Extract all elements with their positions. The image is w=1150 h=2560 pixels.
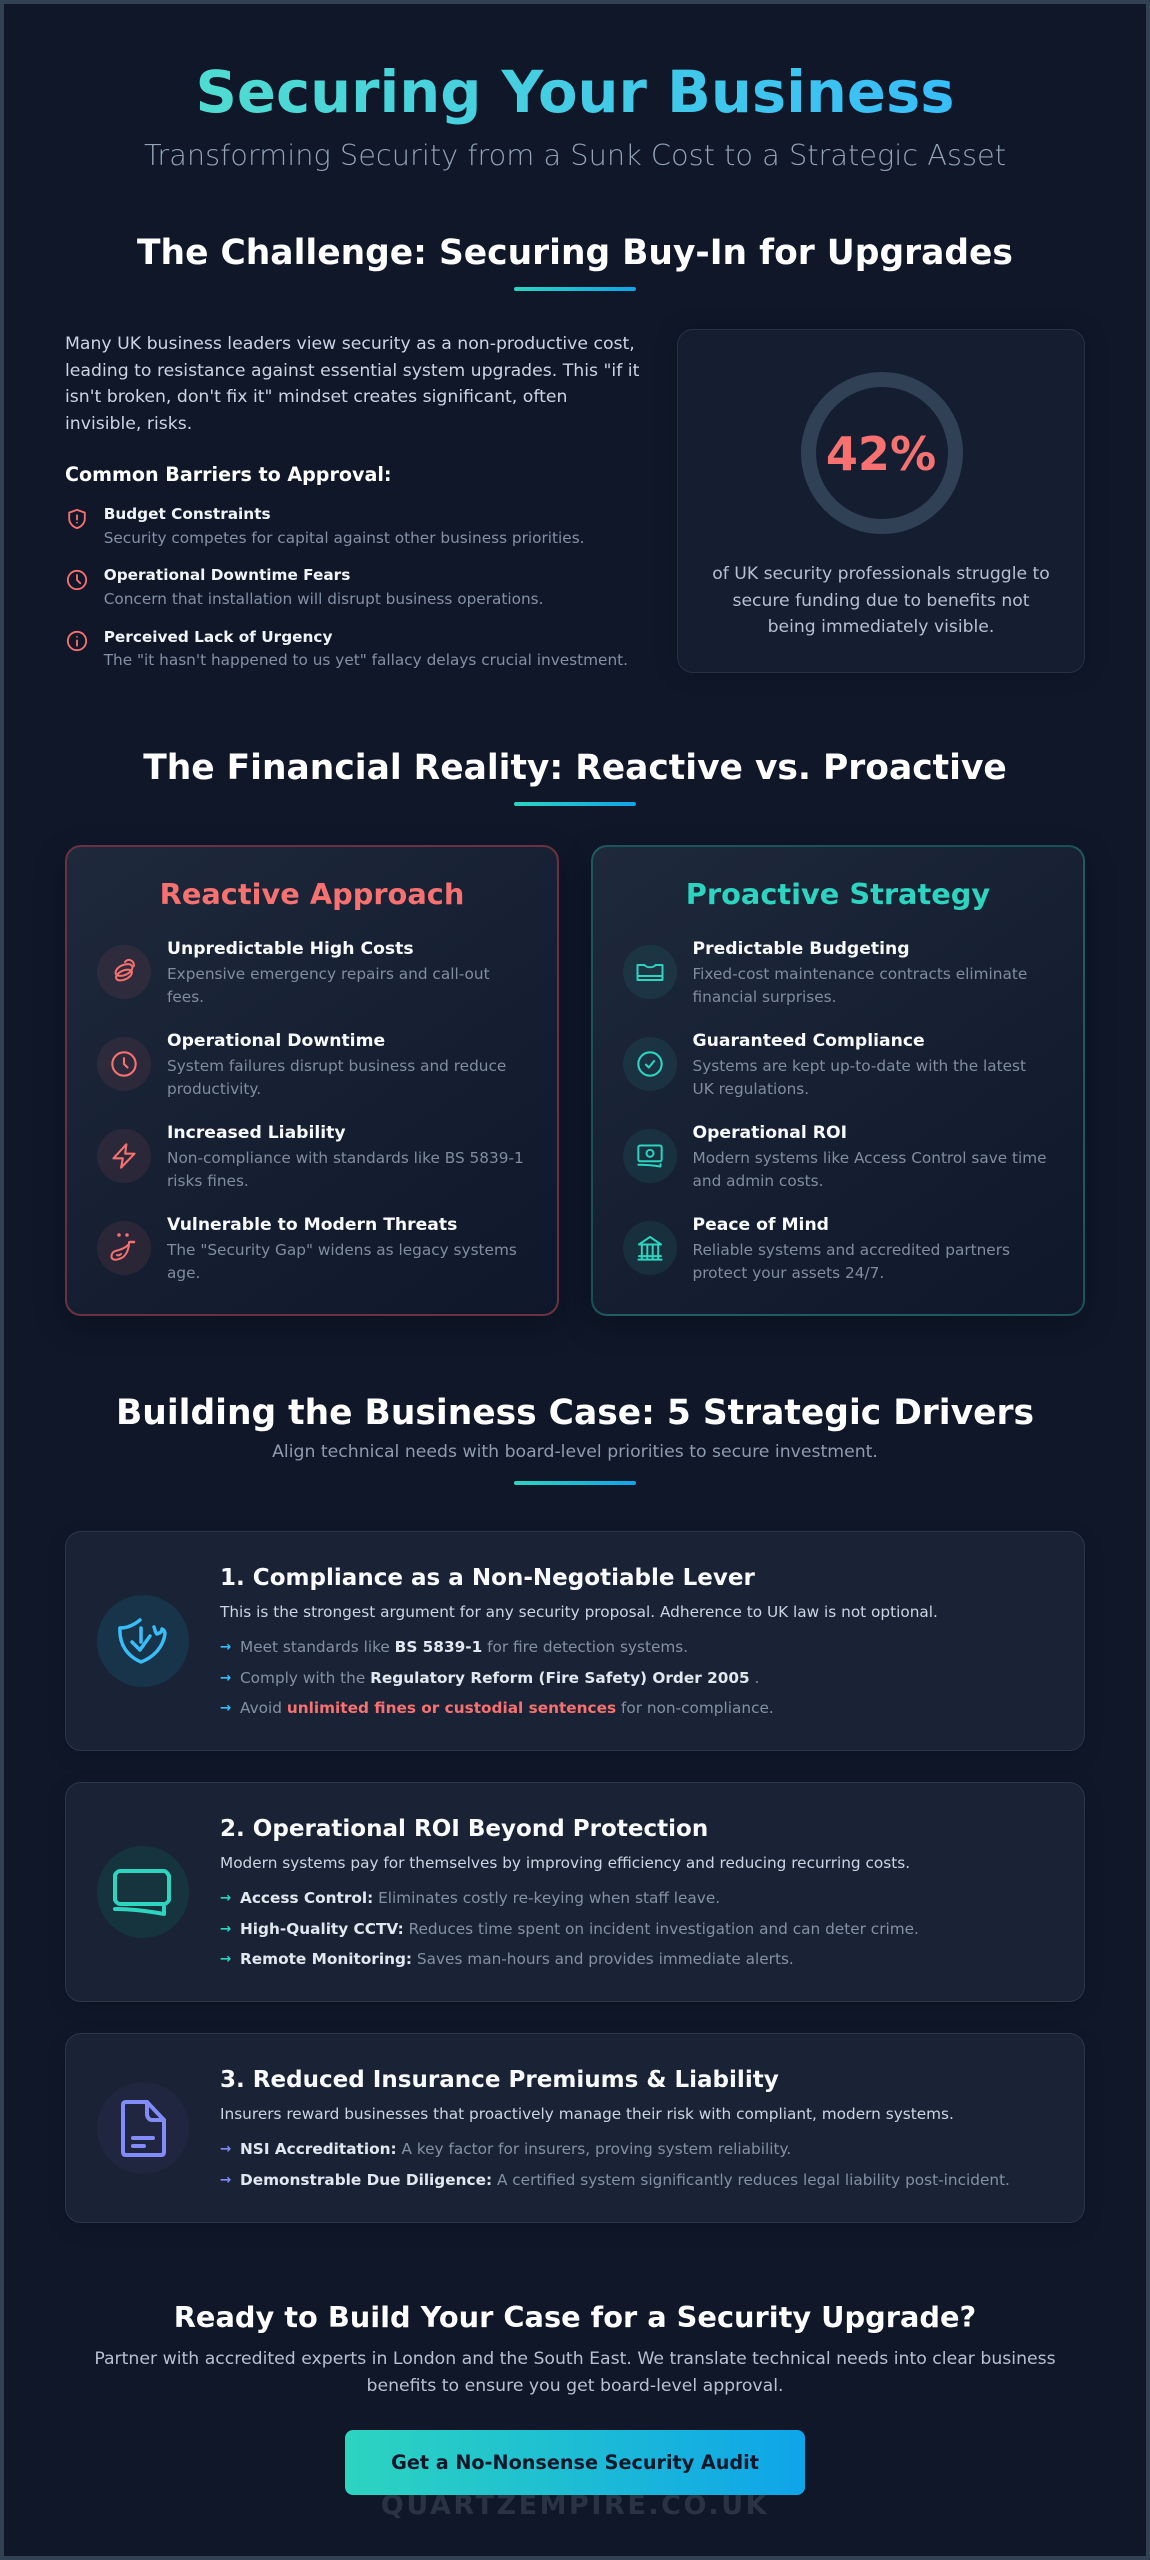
icon: operational device	[97, 1846, 189, 1938]
icon: banknote	[623, 1129, 677, 1183]
item: peace of mind: protect your assets 24/7.	[692, 1264, 884, 1282]
proactive heading: Proactive Strategy	[686, 876, 990, 910]
item: downtime	[97, 1031, 506, 1098]
item: threats: Vulnerable to Modern Threats	[167, 1215, 457, 1235]
heading: call to action: Ready to Build Your Case for a Security Upgrade?	[174, 2300, 976, 2334]
item: liability: Non-compliance with standards like BS 5839-1	[167, 1148, 524, 1166]
subtitle: Transforming Security from a Sunk Cost to a Strategic Asset	[144, 138, 1006, 172]
intro paragraph: isn't broken, don't fix it" mindset creates significant, often	[65, 387, 567, 407]
item: high costs	[97, 939, 490, 1006]
bullet list: →	[220, 1639, 231, 1655]
stat caption: secure funding due to benefits not	[732, 591, 1030, 611]
icon: clock	[66, 570, 88, 590]
barrier: urgency: The "it hasn't happened to us yet" fallacy delays crucial investment.	[104, 651, 628, 669]
bullet list: NSI Accreditation: A key factor for insurers, proving system reliability.	[240, 2140, 791, 2158]
item: downtime: Operational Downtime	[167, 1031, 385, 1051]
bullet list: →	[220, 1951, 231, 1967]
item: high costs: Expensive emergency repairs and call-out	[167, 964, 490, 982]
item: liability	[97, 1123, 524, 1190]
heading: the challenge: The Challenge: Securing Buy-In for Upgrades	[137, 233, 1013, 273]
item: liability: risks fines.	[167, 1172, 249, 1190]
stat caption	[712, 564, 1050, 637]
bullet list: Access Control: Eliminates costly re-keying when staff leave.	[240, 1889, 720, 1907]
item: liability: Increased Liability	[167, 1123, 346, 1143]
item: high costs: Unpredictable High Costs	[167, 939, 414, 959]
item: downtime: productivity.	[167, 1080, 261, 1098]
item: peace of mind	[623, 1215, 1010, 1282]
driver description: Insurers reward businesses that proactively manage their risk with compliant, modern systems.	[220, 2105, 954, 2123]
item: high costs: fees.	[167, 988, 204, 1006]
cta text: Partner with accredited experts in London and the South East. We translate technical needs into clear business	[94, 2349, 1056, 2369]
cta button	[345, 2430, 805, 2495]
intro paragraph: Many UK business leaders view security as a non-productive cost,	[65, 334, 635, 354]
barrier: budget	[68, 505, 585, 546]
ring chart	[801, 372, 963, 534]
driver description: Modern systems pay for themselves by improving efficiency and reducing recurring costs.	[220, 1854, 910, 1872]
barrier: urgency: Perceived Lack of Urgency	[104, 628, 332, 646]
icon: bug glyph	[97, 1221, 151, 1275]
stat number: 42%	[826, 426, 936, 480]
bullet list: Meet standards like BS 5839-1 for fire detection systems.	[240, 1638, 688, 1656]
item: budgeting: financial surprises.	[692, 988, 836, 1006]
icon: shield alert	[68, 508, 86, 530]
icon: tray	[623, 945, 677, 999]
watermark: QUARTZEMPIRE.CO.UK	[381, 2490, 769, 2520]
icon: info	[66, 630, 88, 652]
item: compliance: Guaranteed Compliance	[692, 1031, 925, 1051]
barrier: urgency	[66, 628, 628, 669]
cta text: benefits to ensure you get board-level approval.	[366, 2376, 783, 2396]
barrier: downtime: Concern that installation will disrupt business operations.	[104, 590, 544, 608]
intro paragraph: invisible, risks.	[65, 414, 192, 434]
bullet list: →	[220, 1700, 231, 1716]
panel: 42% statistic	[677, 329, 1085, 673]
heading: financial reality: The Financial Reality: Reactive vs. Proactive	[143, 748, 1007, 788]
icon: check circle	[623, 1037, 677, 1091]
barrier: budget: Budget Constraints	[104, 505, 271, 523]
icon: coin glyph	[97, 945, 151, 999]
title: Securing Your Business	[195, 59, 955, 126]
bullet list: →	[220, 2172, 231, 2188]
section subtitle: Align technical needs with board-level priorities to secure investment.	[272, 1442, 878, 1462]
panel: driver 3	[65, 2033, 1085, 2223]
reactive heading: Reactive Approach	[160, 876, 464, 910]
bullet list: Avoid unlimited fines or custodial sentences for non-compliance.	[240, 1699, 774, 1717]
item: downtime: System failures disrupt business and reduce	[167, 1056, 506, 1074]
item: threats: age.	[167, 1264, 200, 1282]
bullet list	[220, 1889, 919, 1968]
panel: reactive approach	[65, 845, 559, 1316]
bullet list: Demonstrable Due Diligence: A certified system significantly reduces legal liability post-incident.	[240, 2170, 1010, 2188]
item: compliance	[623, 1031, 1026, 1098]
panel: driver 2	[65, 1782, 1085, 2002]
item: budgeting	[623, 939, 1027, 1006]
bullet list: High-Quality CCTV: Reduces time spent on incident investigation and can deter crime.	[240, 1920, 919, 1938]
icon: clock	[97, 1037, 151, 1091]
panel: proactive strategy	[591, 845, 1085, 1316]
cta button: Get a No-Nonsense Security Audit	[391, 2451, 759, 2474]
intro paragraph	[65, 334, 639, 434]
item: compliance: UK regulations.	[692, 1080, 809, 1098]
icon: document	[97, 2082, 189, 2174]
icon: compliance shield	[97, 1595, 189, 1687]
panel: driver 1	[65, 1531, 1085, 1751]
bullet list: Remote Monitoring: Saves man-hours and provides immediate alerts.	[240, 1950, 794, 1968]
panel: challenge intro and barriers	[65, 334, 639, 669]
icon: bank	[623, 1221, 677, 1275]
barrier: downtime	[66, 566, 544, 608]
item: roi	[623, 1123, 1047, 1190]
driver title: 2. Operational ROI Beyond Protection	[220, 1816, 708, 1842]
item: budgeting: Predictable Budgeting	[692, 939, 910, 959]
intro paragraph: leading to resistance against essential system upgrades. This "if it	[65, 361, 639, 381]
bullet list: →	[220, 1920, 231, 1936]
bullet list: →	[220, 2141, 231, 2157]
stat caption: being immediately visible.	[768, 617, 994, 637]
item: roi: Modern systems like Access Control save time	[692, 1148, 1047, 1166]
barrier: downtime: Operational Downtime Fears	[104, 566, 350, 584]
item: peace of mind: Reliable systems and accredited partners	[692, 1240, 1010, 1258]
item: compliance: Systems are kept up-to-date with the latest	[692, 1056, 1026, 1074]
cta text	[94, 2349, 1056, 2396]
bullet list: →	[220, 1670, 231, 1686]
item: peace of mind: Peace of Mind	[692, 1215, 829, 1235]
stat caption: of UK security professionals struggle to	[712, 564, 1050, 584]
item: threats: The "Security Gap" widens as legacy systems	[167, 1240, 517, 1258]
barrier: budget: Security competes for capital against other business priorities.	[104, 528, 585, 546]
item: roi: and admin costs.	[692, 1172, 824, 1190]
driver title: 3. Reduced Insurance Premiums & Liability	[220, 2067, 779, 2093]
driver description: This is the strongest argument for any security proposal. Adherence to UK law is not optional.	[220, 1603, 938, 1621]
item: threats	[97, 1215, 517, 1282]
bullet list: Comply with the Regulatory Reform (Fire Safety) Order 2005 .	[240, 1668, 759, 1686]
barriers heading: Common Barriers to Approval:	[65, 463, 392, 486]
item: budgeting: Fixed-cost maintenance contracts eliminate	[692, 964, 1027, 982]
item: roi: Operational ROI	[692, 1123, 847, 1143]
driver title: 1. Compliance as a Non-Negotiable Lever	[220, 1565, 755, 1591]
heading: business case: Building the Business Case: 5 Strategic Drivers	[116, 1393, 1034, 1433]
bullet list	[220, 2140, 1010, 2188]
bullet list	[220, 1638, 774, 1717]
icon: bolt	[97, 1129, 151, 1183]
bullet list: →	[220, 1890, 231, 1906]
